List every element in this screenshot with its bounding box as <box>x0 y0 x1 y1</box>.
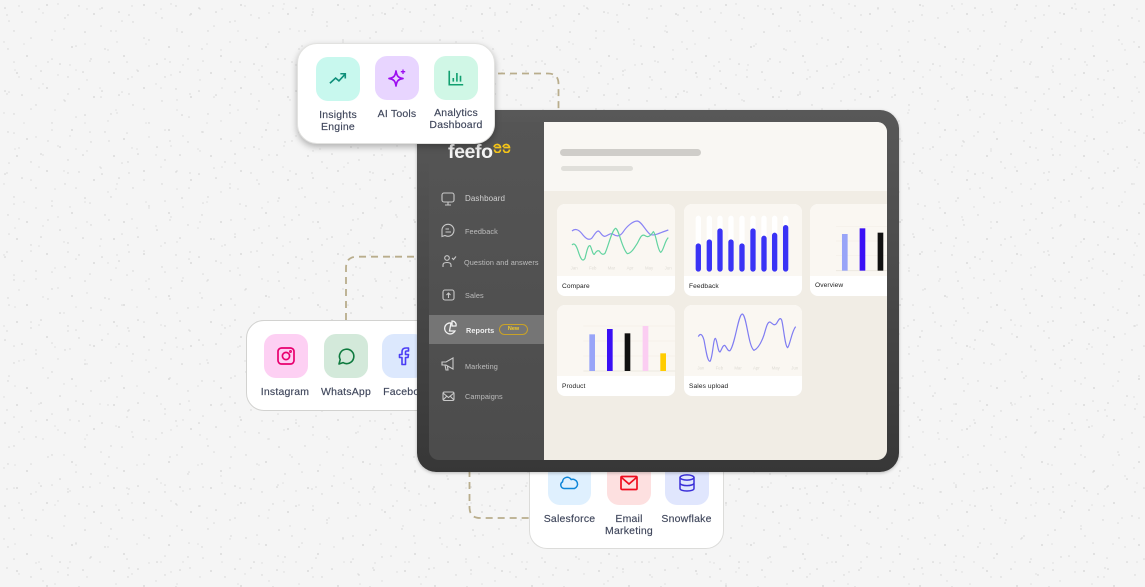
caption: Product: Product <box>562 382 585 390</box>
icon: Analytics Dashboard <box>434 56 478 100</box>
card: Product <box>557 305 675 396</box>
chart: Compare lines: Jan <box>571 266 578 271</box>
icon: Salesforce <box>548 461 591 504</box>
label: Analytics Dashboard: Analytics <box>434 107 478 119</box>
badge: New <box>499 324 528 335</box>
tablet device <box>417 110 899 472</box>
icon: Email Marketing <box>607 461 650 504</box>
label: Email Marketing: Marketing <box>605 525 653 537</box>
label: AI Tools: AI Tools <box>378 108 416 120</box>
card: Overview <box>810 204 928 296</box>
icon: Instagram <box>264 334 308 378</box>
nav item: Campaigns: Campaigns <box>465 392 503 401</box>
chart: Sales upload line: Feb <box>716 366 724 371</box>
subtitle placeholder <box>561 166 633 171</box>
chart: Sales upload line: Apr <box>753 366 760 371</box>
header band <box>544 122 887 191</box>
card: Sales upload <box>684 305 802 396</box>
label: Insights Engine: Insights <box>319 109 357 121</box>
chart: Sales upload line: Jun <box>791 366 799 371</box>
chart: Compare lines: Jun <box>665 266 672 271</box>
label: Email Marketing <box>605 513 653 537</box>
label: Analytics Dashboard <box>429 107 483 131</box>
nav item: Dashboard: Dashboard <box>465 194 505 203</box>
chart: Sales upload line: May <box>772 366 781 371</box>
card: Compare <box>557 204 675 296</box>
label: WhatsApp: WhatsApp <box>321 386 371 398</box>
label: Salesforce: Salesforce <box>544 513 595 525</box>
label: Email Marketing: Email <box>615 513 643 525</box>
label: Snowflake: Snowflake <box>661 513 712 525</box>
card: Feedback <box>684 204 802 296</box>
nav item: Marketing: Marketing <box>465 362 498 371</box>
chart: Compare lines: Mar <box>608 266 616 271</box>
icon: Insights Engine <box>316 57 360 100</box>
caption: Sales upload: Sales upload <box>689 382 728 390</box>
panel: insights tools <box>297 43 495 144</box>
label: Facebook: Facebook <box>383 386 431 398</box>
caption: Compare: Compare <box>562 282 590 290</box>
nav item: Sales: Sales <box>465 290 484 300</box>
label: Insights Engine <box>319 109 357 133</box>
icon: WhatsApp <box>324 334 368 378</box>
nav item: Feedback: Feedback <box>465 227 498 236</box>
chart: Compare lines: May <box>645 266 654 271</box>
chart: Sales upload line: Jan <box>697 366 705 371</box>
nav item: Reports: Reports <box>466 326 494 334</box>
icon: Facebook <box>382 334 426 378</box>
label: Insights Engine: Engine <box>321 121 355 133</box>
chart: Compare lines: Apr <box>627 266 634 271</box>
chart: Compare lines: Feb <box>589 266 597 271</box>
badge: New: New <box>508 326 519 332</box>
sidebar <box>429 122 544 460</box>
icon: AI Tools <box>375 56 418 100</box>
panel: data sources <box>529 450 724 549</box>
nav item: Question and answers: Question and answers <box>464 258 539 266</box>
chart: Sales upload line: Mar <box>734 366 742 371</box>
nav icons <box>441 192 457 401</box>
main screen <box>544 122 887 460</box>
caption: Feedback: Feedback <box>689 282 719 290</box>
title placeholder <box>560 149 701 156</box>
panel: social sources <box>246 320 446 411</box>
icon: Snowflake database <box>665 461 708 504</box>
label: Instagram: Instagram <box>261 386 309 398</box>
highlighted row: Reports <box>429 315 544 344</box>
caption: Overview: Overview <box>815 282 843 289</box>
label: Analytics Dashboard: Dashboard <box>429 119 483 131</box>
feefo logo: feefo <box>448 141 493 163</box>
